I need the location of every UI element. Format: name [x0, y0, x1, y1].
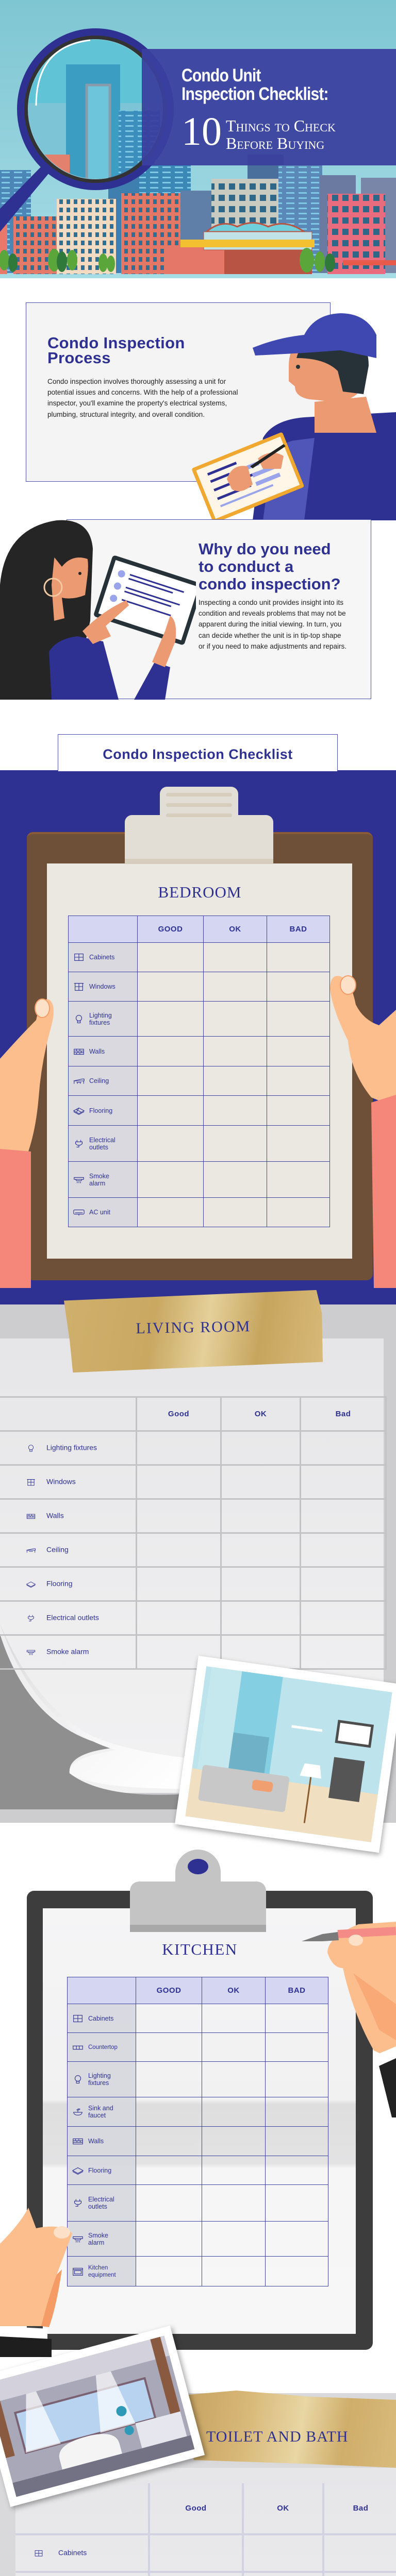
illustration: inspector man with clipboard: [192, 313, 396, 520]
table: living room checklist: OK: [255, 1410, 267, 1418]
hero: city skyline with magnifier: [0, 0, 396, 278]
table: bedroom checklist: Flooring: [89, 1107, 112, 1114]
table: bedroom checklist: Lighting: [89, 1012, 112, 1019]
table: living room checklist: [0, 1396, 387, 1670]
table: living room checklist: Bad: [336, 1410, 351, 1418]
table: living room checklist: Good: [168, 1410, 189, 1418]
table: bedroom checklist: Cabinets: [89, 954, 114, 961]
table: living room checklist: Lighting fixtures: [46, 1443, 97, 1451]
table: kitchen checklist: OK: [227, 1986, 240, 1995]
table: toilet and bath checklist: Cabinets: [58, 2548, 87, 2556]
heading box: Condo Inspection Checklist: Condo Inspection Checklist: [103, 747, 293, 762]
table: kitchen checklist: outlets: [88, 2203, 107, 2210]
table: toilet and bath checklist: Bad: [353, 2504, 368, 2513]
photo: bathroom: [0, 2326, 205, 2507]
table: bedroom checklist: outlets: [89, 1144, 108, 1151]
panel: condo inspection process: [26, 302, 331, 482]
hands holding bedroom clipboard: [0, 975, 396, 1288]
tape: TOILET AND BATH: TOILET AND BATH: [206, 2428, 349, 2445]
title: Condo Unit Inspection Checklist: Condo Unit: [182, 65, 261, 86]
table: bedroom checklist: [68, 916, 330, 1227]
title banner: [142, 49, 396, 165]
table: bedroom checklist: Smoke: [89, 1173, 109, 1180]
heading box: Condo Inspection Checklist: [58, 734, 338, 771]
table: kitchen checklist: Walls: [88, 2138, 104, 2145]
heading: Condo Inspection Process: Process: [47, 349, 111, 367]
sheet: [15, 2468, 396, 2576]
photo: living room: [175, 1656, 396, 1853]
tape: LIVING ROOM: [64, 1290, 323, 1372]
heading: Condo Inspection Process: Condo Inspection: [47, 334, 185, 352]
table: kitchen checklist: alarm: [88, 2239, 104, 2246]
table: bedroom checklist: BAD: [290, 924, 307, 934]
table: bedroom checklist: AC unit: [89, 1209, 110, 1216]
table: bedroom checklist: fixtures: [89, 1019, 110, 1026]
toilet and bath background: [0, 2393, 396, 2576]
subtitle: 10 things to check before buying: Before Buying: [226, 134, 324, 152]
table: living room checklist: Ceiling: [46, 1545, 69, 1553]
table: bedroom checklist: Ceiling: [89, 1077, 109, 1084]
heading: Why do you need to conduct a condo inspection?: Why do you need: [199, 540, 331, 558]
tape: TOILET AND BATH: [183, 2391, 396, 2468]
table: toilet and bath checklist: OK: [277, 2504, 289, 2513]
table: kitchen checklist: fixtures: [88, 2079, 109, 2087]
table: bedroom checklist: OK: [229, 924, 241, 934]
table: living room checklist: Electrical outlets: [46, 1613, 99, 1621]
table: toilet and bath checklist: [15, 2483, 396, 2576]
table: kitchen checklist: BAD: [288, 1986, 305, 1995]
table: kitchen checklist: equipment: [88, 2272, 116, 2278]
subtitle: 10 things to check before buying: Things to Check: [226, 116, 336, 135]
living room sheet background: [0, 1304, 396, 1823]
table: kitchen checklist: Sink and: [88, 2105, 113, 2112]
table: living room checklist: Flooring: [46, 1579, 73, 1587]
tape: LIVING ROOM: LIVING ROOM: [136, 1318, 251, 1337]
board: [27, 1891, 373, 2350]
paper: [47, 863, 352, 1259]
table: kitchen checklist: Smoke: [88, 2232, 108, 2239]
heading: BEDROOM: BEDROOM: [158, 883, 241, 901]
table: kitchen checklist: Flooring: [88, 2167, 111, 2174]
illustration: woman with tablet: [0, 520, 196, 700]
paper: [43, 1908, 356, 2334]
text: process description: Condo inspection involves thoroughly assessing a unit for potential issues and concerns. With the help of a professional inspector, you'll examine the property's electrical systems, plumbing, structural integrity, and overall condition.: [47, 378, 238, 418]
title: Condo Unit Inspection Checklist: Inspection Checklist:: [182, 84, 328, 104]
panel: why conduct a condo inspection: [67, 519, 371, 699]
clip with ring: [130, 1850, 266, 1932]
hand with pen (right): [302, 1922, 396, 2117]
text: reasons description: Inspecting a condo unit provides insight into its condition and reveals problems that may not be apparent during the initial viewing. In turn, you can decide whether the unit is in tip-top shape or if you need to make adjustments and repairs.: [199, 599, 346, 650]
table: bedroom checklist: Windows: [89, 983, 116, 990]
page curl: [0, 1625, 184, 1809]
table: bedroom checklist: Electrical: [89, 1137, 116, 1144]
table: kitchen checklist: GOOD: [157, 1986, 181, 1995]
board: [27, 832, 373, 1280]
clipboard: bedroom: [27, 787, 373, 1280]
table: living room checklist: Windows: [46, 1477, 76, 1485]
blue background: bedroom section: [0, 770, 396, 1306]
table: bedroom checklist: alarm: [89, 1180, 105, 1187]
table: kitchen checklist: Electrical: [88, 2196, 114, 2203]
table: kitchen checklist: Lighting: [88, 2072, 111, 2079]
title: Condo Unit Inspection Checklist: [182, 65, 328, 104]
table: kitchen checklist: faucet: [88, 2112, 106, 2119]
table: living room checklist: Walls: [46, 1511, 64, 1519]
table: kitchen checklist: Countertop: [88, 2044, 118, 2050]
heading: Why do you need to conduct a condo inspection?: condo inspection?: [199, 575, 341, 593]
table: kitchen checklist: Cabinets: [88, 2014, 113, 2022]
subtitle: 10 things to check before buying: 10: [182, 109, 222, 154]
heading: Condo Inspection Process: [47, 334, 185, 367]
subtitle: 10 things to check before buying: [182, 109, 336, 154]
heading: Why do you need to conduct a condo inspection?: to conduct a: [199, 557, 293, 575]
clipboard: kitchen: [27, 1850, 373, 2350]
table: bedroom checklist: GOOD: [158, 924, 183, 934]
hand holding kitchen clipboard (left): [0, 2208, 72, 2357]
sheet: [0, 1338, 384, 1793]
table: bedroom checklist: Walls: [89, 1048, 105, 1055]
table: living room checklist: Smoke alarm: [46, 1647, 89, 1655]
heading: KITCHEN: KITCHEN: [162, 1940, 238, 1958]
table: kitchen checklist: Kitchen: [88, 2265, 108, 2271]
table: kitchen checklist: [67, 1977, 328, 2286]
clip: [125, 787, 273, 864]
table: toilet and bath checklist: Good: [185, 2504, 207, 2513]
heading: Why do you need to conduct a condo inspection?: [199, 540, 341, 593]
